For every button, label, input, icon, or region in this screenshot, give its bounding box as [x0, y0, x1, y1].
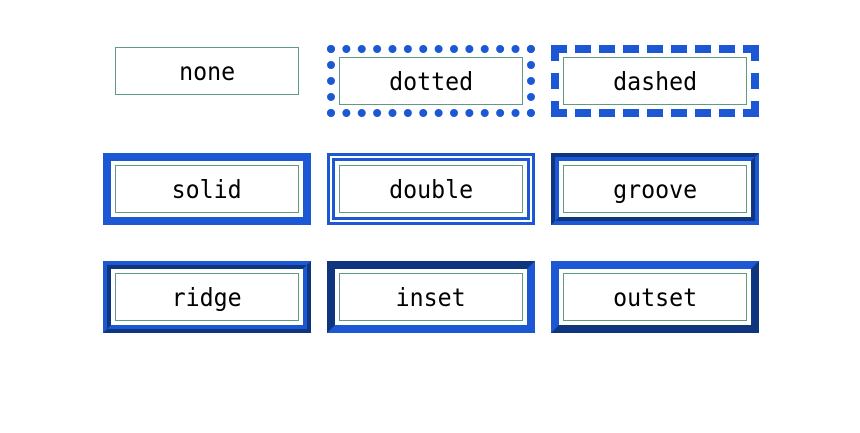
panel: ridge — [103, 261, 311, 333]
figure: border style samples — [103, 45, 759, 333]
panel: inset: inset — [396, 283, 466, 312]
panel: outset — [551, 261, 759, 333]
panel: dotted: dotted — [389, 67, 473, 96]
panel: double: double — [389, 175, 473, 204]
panel: none: none — [179, 57, 235, 86]
panel: outset: outset — [613, 283, 697, 312]
panel: dotted — [327, 45, 535, 117]
panel: groove: groove — [613, 175, 697, 204]
panel: groove — [551, 153, 759, 225]
panel: dashed: dashed — [613, 67, 697, 96]
panel: solid: solid — [172, 175, 242, 204]
panel: dashed — [551, 45, 759, 117]
panel: double — [327, 153, 535, 225]
panel: inset — [327, 261, 535, 333]
panel: ridge: ridge — [172, 283, 242, 312]
panel: solid — [103, 153, 311, 225]
